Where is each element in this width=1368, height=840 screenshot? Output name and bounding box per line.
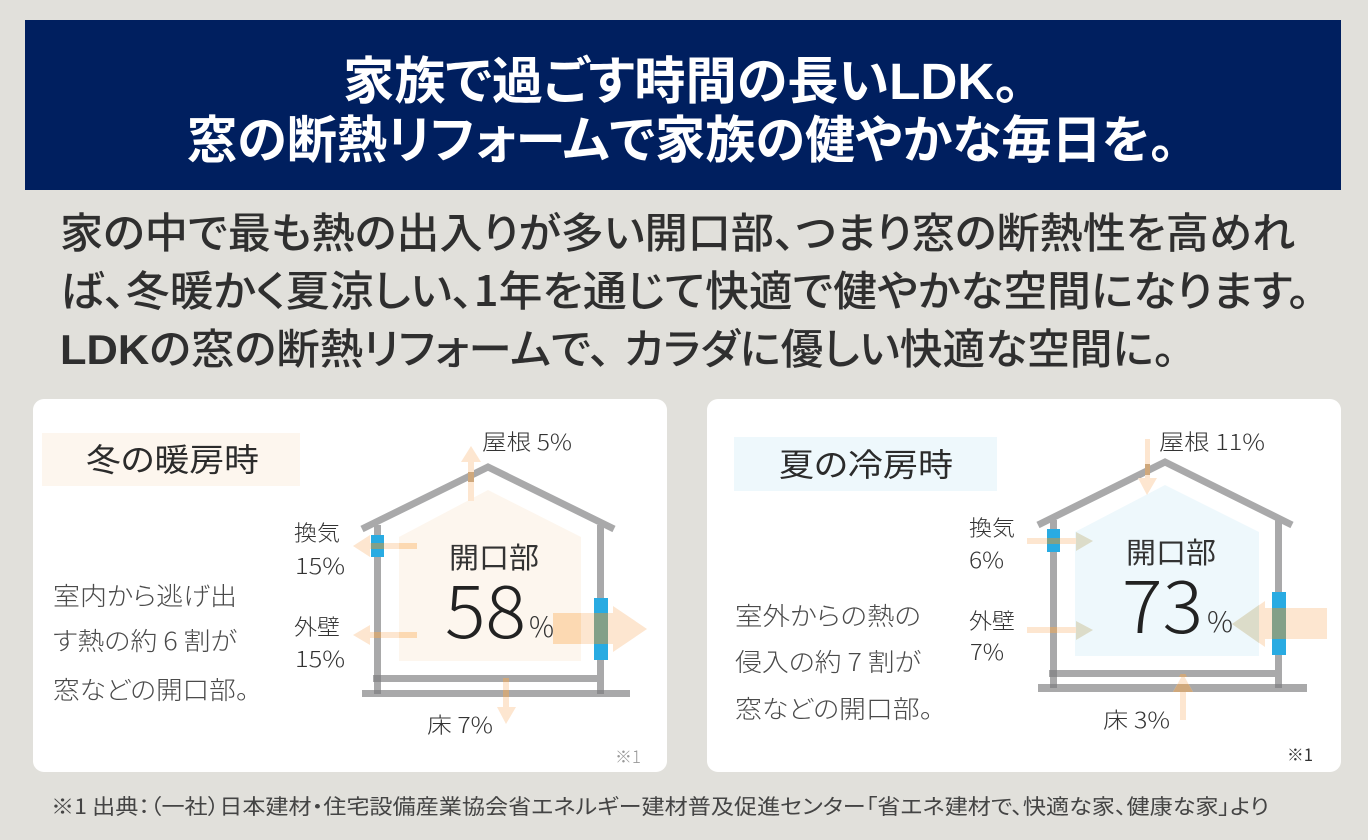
title text line 1: 家族で過ごす時間の長いLDK。 — [343, 53, 1020, 110]
arrow: ventilation — [353, 535, 417, 557]
label: wall: 外壁 — [969, 604, 1015, 636]
label: roof: 屋根 11% — [1159, 425, 1265, 457]
intro text block: カラダに優しい快適な空間に。 — [624, 316, 1175, 377]
arrow: wall — [1027, 621, 1093, 640]
arrow: floor — [497, 678, 516, 724]
label: wall: 7% — [970, 635, 1004, 667]
intro text block: LDKの窓の断熱リフォームで、 — [60, 326, 611, 373]
title text line 2: 窓の断熱リフォームで家族の健やかな毎日を。 — [187, 99, 1175, 173]
opening value: % — [1207, 601, 1233, 641]
summer heading — [734, 437, 997, 491]
label: wall — [969, 604, 1015, 667]
arrow: floor — [1173, 674, 1193, 720]
label: ventilation: 15% — [295, 549, 345, 581]
opening value: % — [529, 606, 554, 646]
winter footnote mark: ※1 — [615, 743, 641, 768]
arrow: roof — [1138, 439, 1157, 495]
summer heading: 夏の冷房時 — [779, 440, 953, 486]
intro text block — [60, 200, 1310, 377]
summer description — [735, 597, 933, 726]
summer description: 侵入の約 7 割が — [735, 643, 921, 679]
label: ventilation: 6% — [969, 543, 1004, 575]
opening value — [445, 557, 554, 659]
opening label: 開口部 — [449, 535, 539, 577]
summer description: 窓などの開口部。 — [735, 690, 933, 726]
title banner — [25, 20, 1341, 190]
label: wall: 外壁 — [294, 610, 340, 642]
arrow: ventilation — [1027, 532, 1093, 551]
intro text block: ば、冬暖かく夏涼しい、1年を通じて快適で健やかな空間になります。 — [60, 258, 1310, 319]
winter description: 室内から逃げ出 — [53, 577, 237, 613]
label: floor: 床 7% — [427, 708, 493, 740]
label: ventilation — [294, 516, 345, 581]
panel: summer cooling — [707, 399, 1341, 772]
arrow: wall — [353, 625, 417, 645]
arrow: opening — [553, 606, 647, 652]
opening value: 58 — [445, 557, 526, 659]
panel: winter heating — [33, 399, 667, 772]
arrow: roof — [461, 446, 481, 501]
label: wall — [294, 610, 345, 674]
winter description: す熱の約 6 割が — [53, 622, 237, 658]
opening value: 73 — [1122, 552, 1203, 654]
summer footnote mark: ※1 — [1287, 741, 1313, 766]
opening label: 開口部 — [1126, 530, 1216, 572]
label: ventilation: 換気 — [969, 511, 1015, 543]
label: floor: 床 3% — [1103, 703, 1170, 735]
winter description — [53, 577, 249, 707]
winter house diagram — [294, 425, 647, 740]
intro text block: 家の中で最も熱の出入りが多い開口部、つまり窓の断熱性を高めれ — [60, 200, 1295, 261]
source footnote: ※1 出典：（一社）日本建材・住宅設備産業協会省エネルギー建材普及促進センター「省エネ建材で、快適な家、健康な家」より — [51, 791, 1269, 821]
opening value — [1122, 552, 1233, 654]
label: wall: 15% — [295, 642, 345, 674]
label: roof: 屋根 5% — [482, 425, 572, 457]
summer house diagram — [969, 425, 1327, 735]
summer description: 室外からの熱の — [735, 597, 921, 633]
winter heading: 冬の暖房時 — [86, 435, 259, 481]
winter heading — [42, 433, 300, 486]
label: ventilation — [969, 511, 1015, 575]
winter description: 窓などの開口部。 — [53, 671, 249, 707]
label: ventilation: 換気 — [294, 516, 340, 548]
arrow: opening — [1232, 601, 1327, 647]
